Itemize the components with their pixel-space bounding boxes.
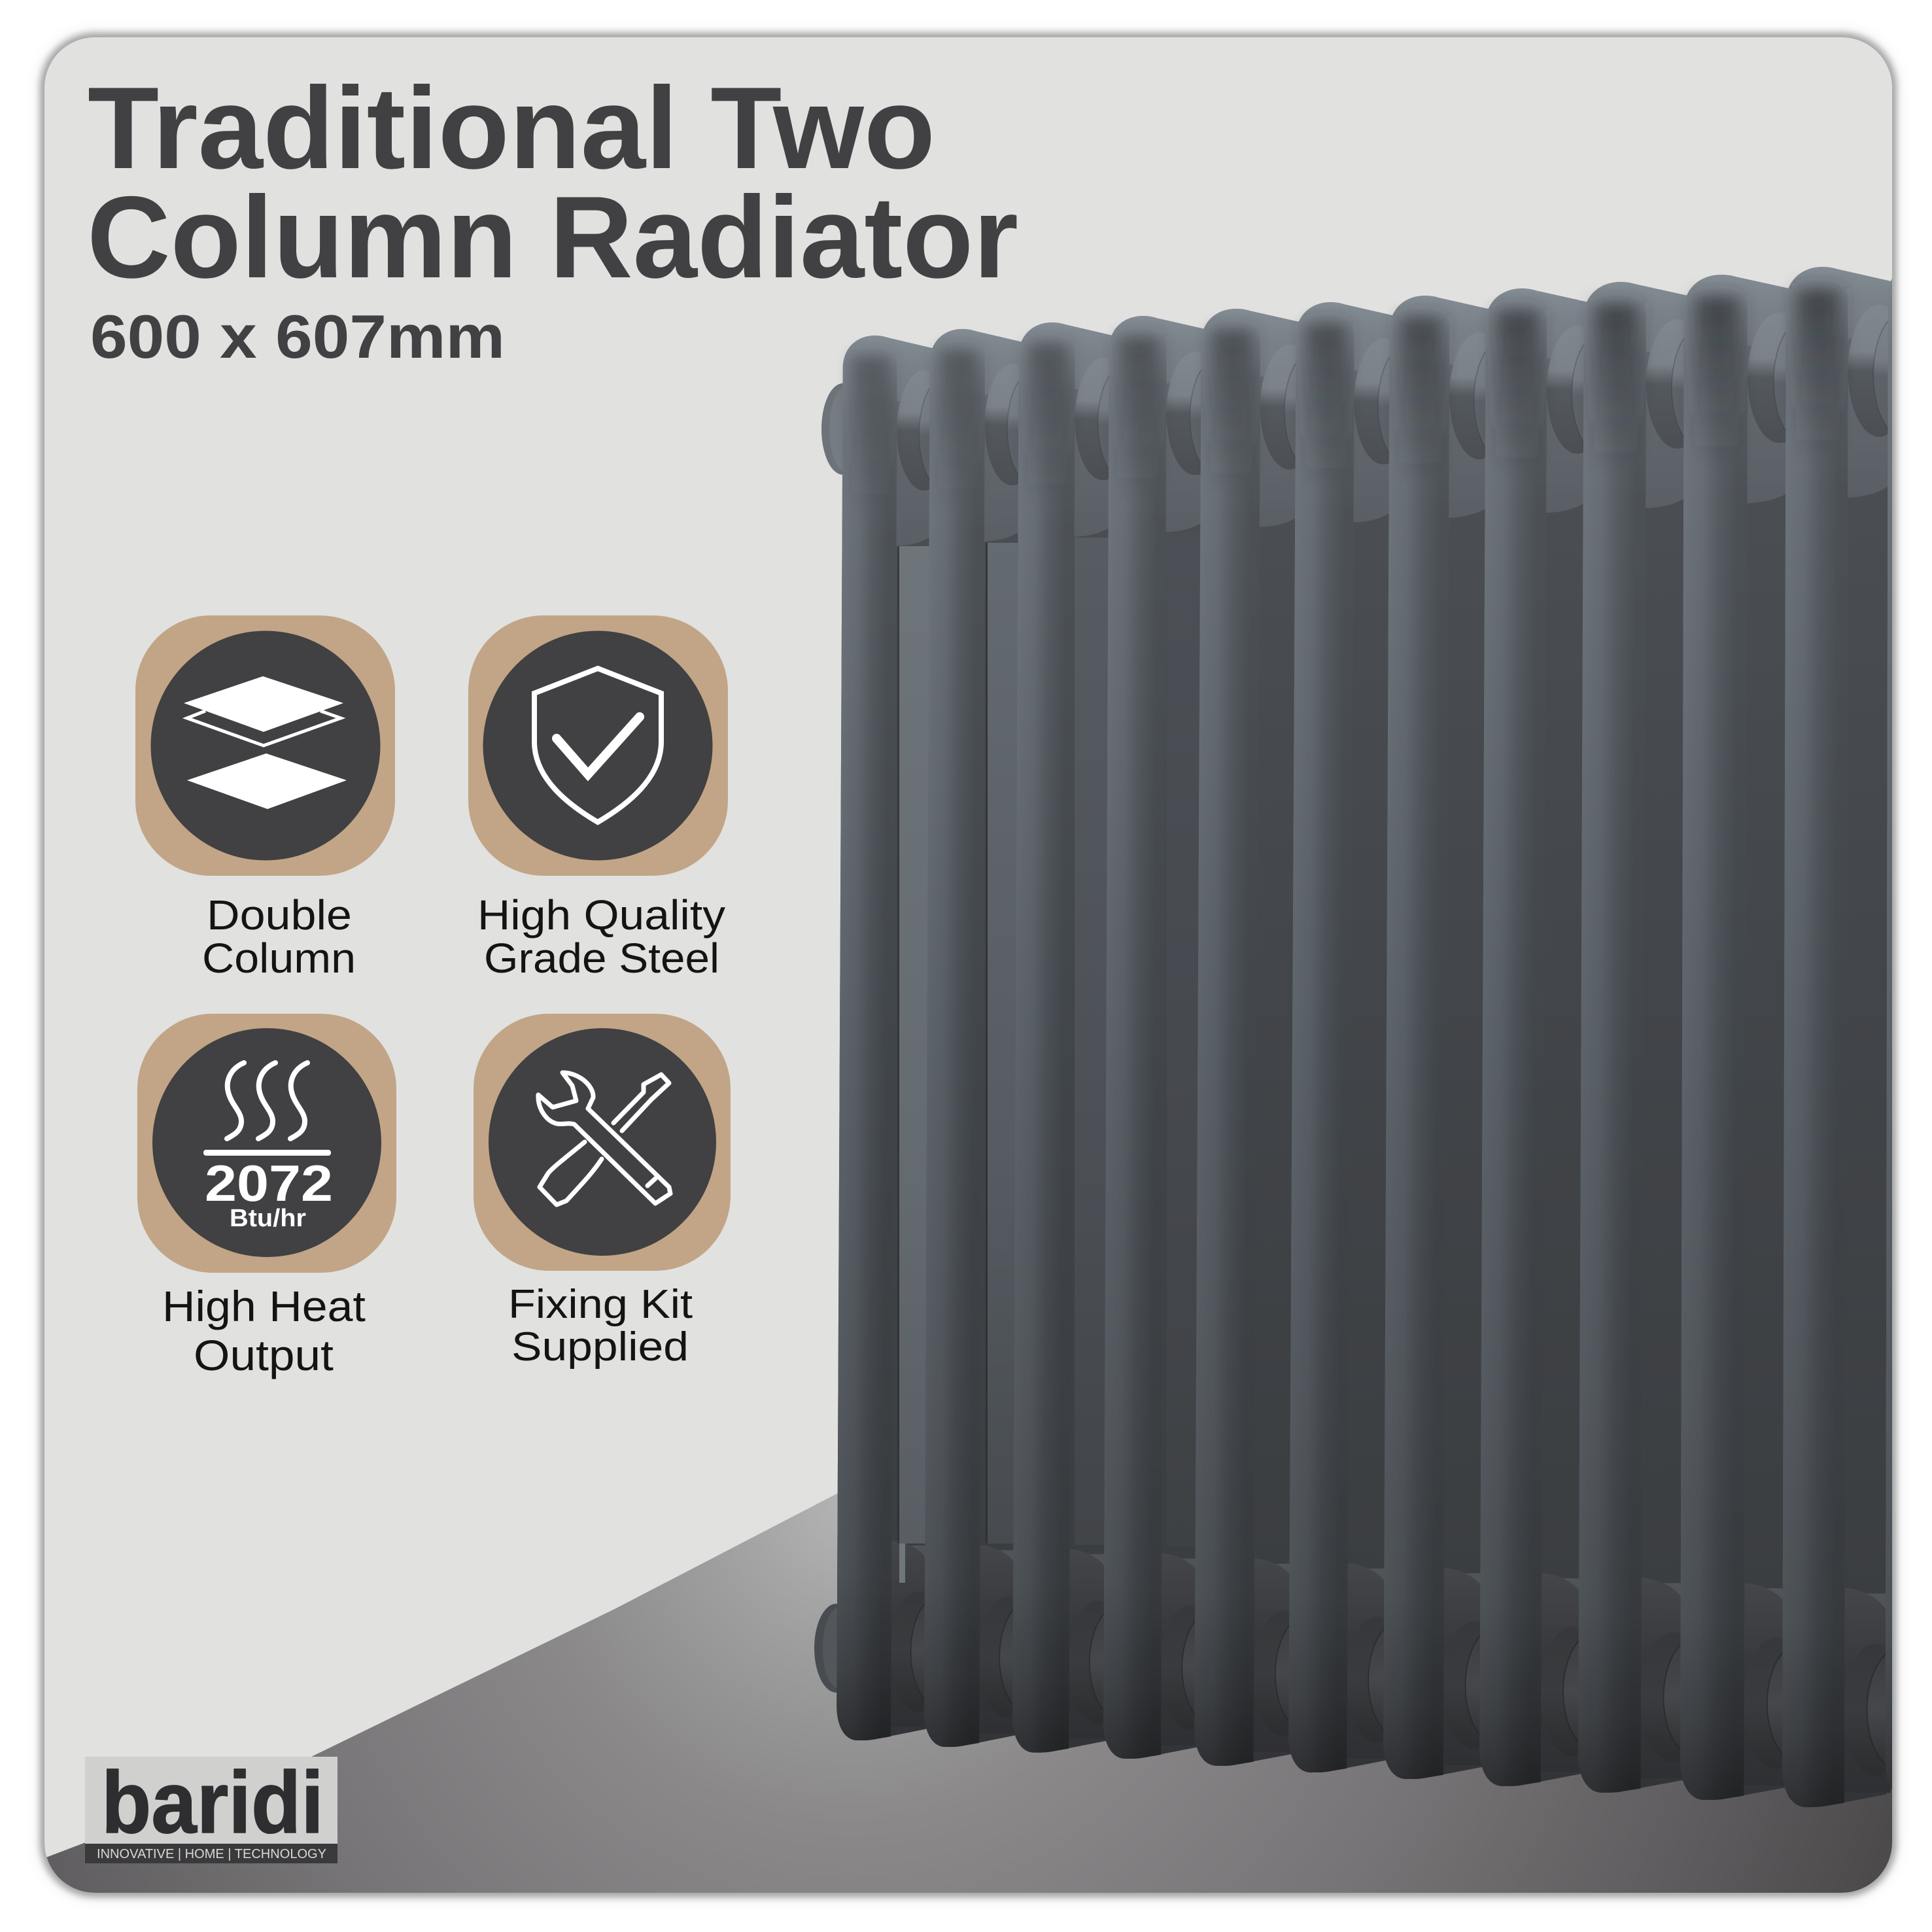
badge circle <box>150 630 381 861</box>
back column 2 <box>986 543 1018 1544</box>
radiator section 11 <box>1782 267 1932 1807</box>
badge background <box>137 1014 396 1273</box>
icon: stacked layers <box>184 676 347 809</box>
label <box>508 1282 693 1370</box>
back column 3 <box>1075 538 1109 1545</box>
label: High Quality <box>477 891 725 939</box>
back column 1 <box>897 546 929 1583</box>
label: High Heat <box>162 1282 366 1330</box>
badge circle <box>489 1028 716 1256</box>
title line 1: Traditional Two <box>88 63 935 193</box>
feature: high heat output <box>137 1014 396 1379</box>
badge background <box>135 615 395 876</box>
heat rule <box>203 1150 331 1156</box>
logo strapline band <box>85 1844 337 1863</box>
radiator section 8 <box>1479 288 1636 1786</box>
feature: high quality steel <box>468 615 728 982</box>
label: Output <box>194 1331 334 1379</box>
label: Double <box>207 891 352 939</box>
left end cap top <box>821 383 843 475</box>
size subtitle: 600 x 607mm <box>90 302 505 371</box>
title line 2: Column Radiator <box>87 172 1018 302</box>
title <box>87 63 1018 371</box>
icon: spanner and screwdriver <box>538 1073 670 1205</box>
badge background <box>474 1014 731 1271</box>
icon: heat waves <box>227 1063 307 1139</box>
label: Grade Steel <box>484 935 719 982</box>
radiator section 7 <box>1383 296 1489 1779</box>
logo <box>85 1754 337 1863</box>
left end cap bottom <box>814 1604 837 1693</box>
radiator section 2 <box>924 329 1022 1747</box>
radiator section 9 <box>1578 282 1736 1793</box>
radiator section 10 <box>1680 275 1840 1800</box>
radiator section 5 <box>1194 309 1299 1766</box>
heat unit: Btu/hr <box>230 1205 306 1232</box>
label <box>477 891 725 982</box>
floor <box>46 1493 1892 1893</box>
label: Supplied <box>511 1324 689 1370</box>
label <box>162 1282 366 1379</box>
feature: fixing kit <box>474 1014 731 1370</box>
label: Column <box>202 935 356 982</box>
badge circle <box>483 630 713 861</box>
label <box>202 891 356 982</box>
heat value: 2072 <box>205 1154 333 1212</box>
logo panel <box>85 1757 337 1844</box>
radiator section 4 <box>1103 316 1203 1759</box>
logo strapline: INNOVATIVE | HOME | TECHNOLOGY <box>97 1847 326 1861</box>
icon: shield with check <box>534 668 661 822</box>
label: Fixing Kit <box>508 1282 693 1327</box>
radiator section 12 sliver <box>1886 260 1932 1801</box>
badge background <box>468 615 728 876</box>
radiator section 3 <box>1012 322 1112 1753</box>
radiator section 1 <box>837 336 933 1740</box>
radiator section 6 <box>1288 302 1392 1772</box>
badge circle <box>152 1028 381 1257</box>
feature: double column <box>135 615 395 982</box>
back column 4 <box>1167 533 1201 1547</box>
logo wordmark: baridi <box>101 1754 324 1852</box>
radiator <box>814 260 1932 1807</box>
